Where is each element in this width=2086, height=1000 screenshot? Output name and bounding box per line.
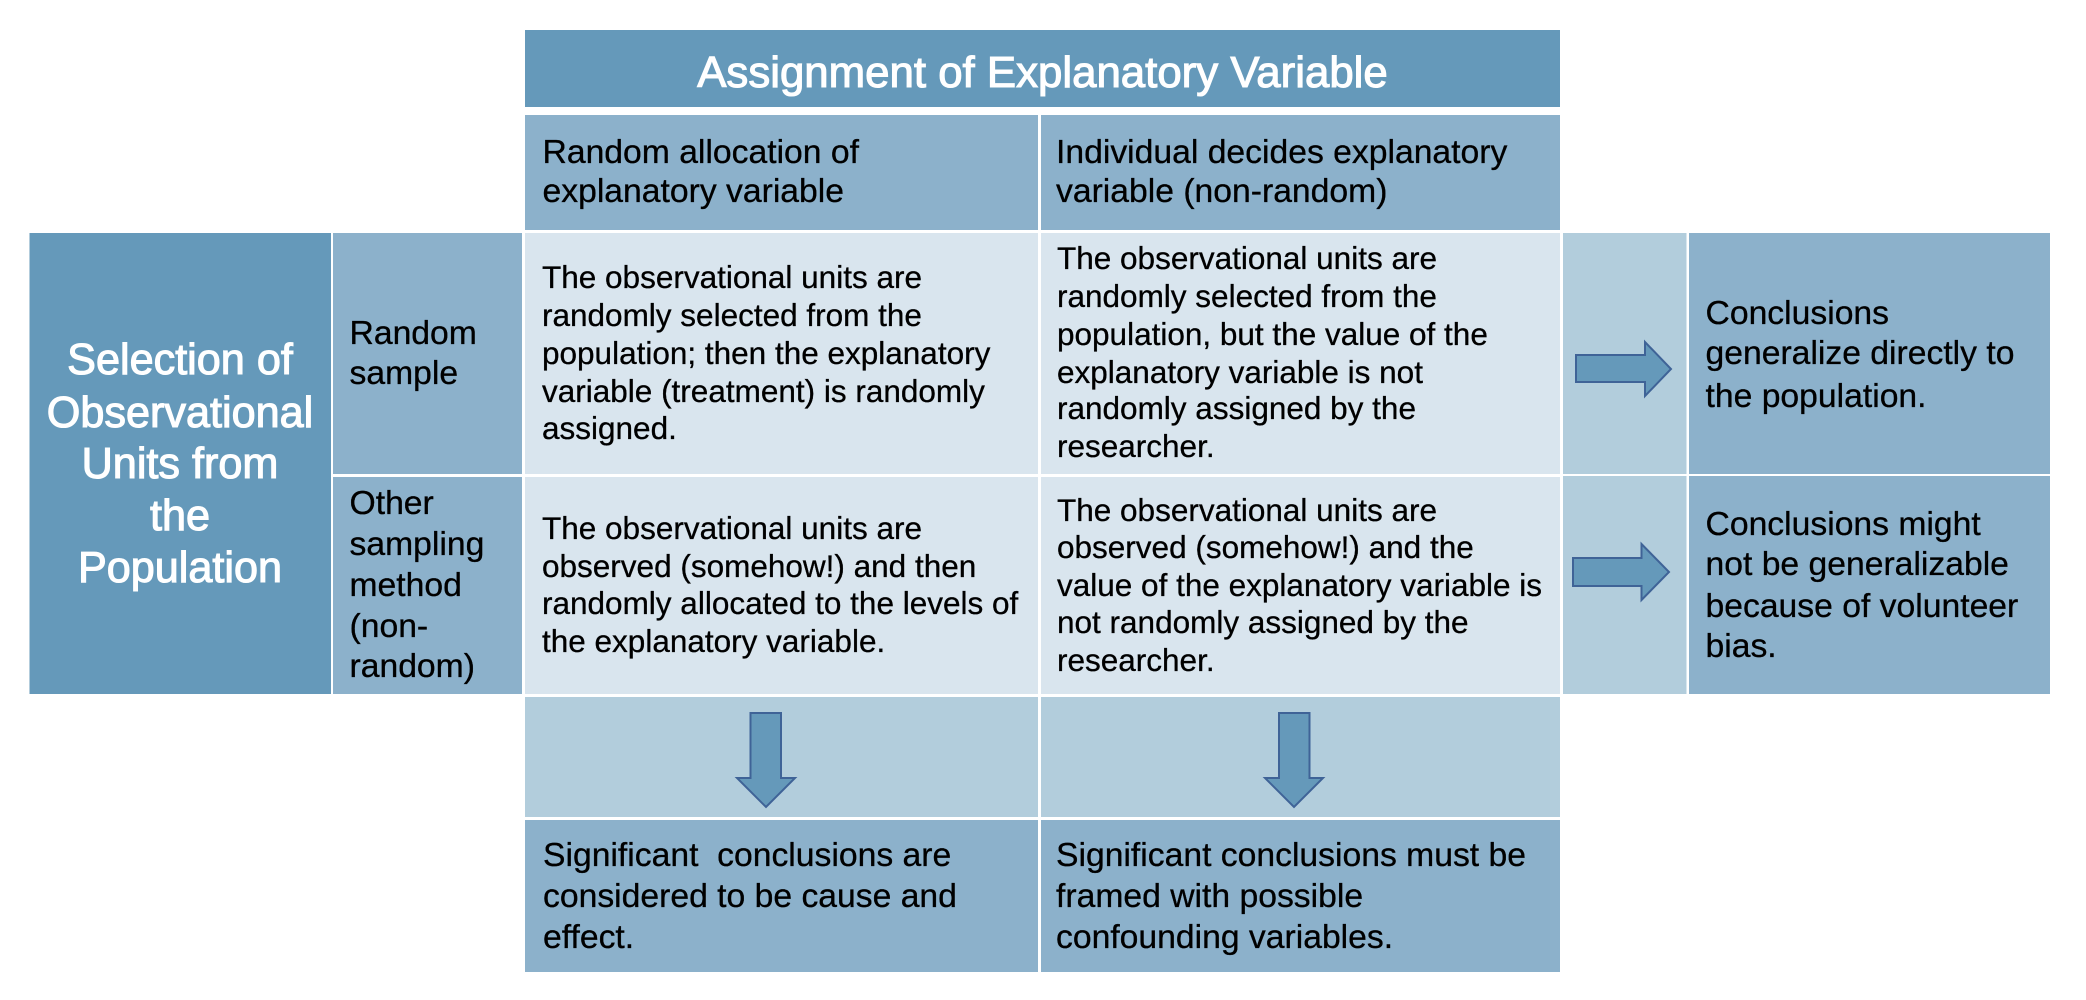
cell: random sample, individual decides: randomly assigned by the [1057,390,1416,426]
cell: other sampling, random allocation: randomly allocated to the levels of [542,585,1019,621]
cell: random sample, random allocation: population; then the explanatory [542,335,991,371]
column header: individual decides [1041,115,1560,230]
row header: other sampling method: method [350,566,462,604]
column header: individual decides: Individual decides explanatory [1056,133,1507,171]
cell: other sampling, random allocation: The observational units are [542,510,922,546]
column header: random allocation: Random allocation of [542,133,860,171]
cell: random sample, individual decides: researcher. [1057,428,1215,464]
row header: other sampling method: sampling [350,525,484,563]
conclusion: cause and effect: Significant conclusions are [543,836,951,874]
cell: random sample, random allocation: variable (treatment) is randomly [542,373,985,409]
cell: random sample, individual decides [1041,233,1560,474]
conclusion: generalize directly [1689,233,2050,474]
conclusion: confounding variables: Significant conclusions must be [1056,836,1526,874]
title: Assignment of Explanatory Variable [525,30,1560,107]
cell: other sampling, individual decides: value of the explanatory variable is [1057,567,1542,603]
cell: other sampling, random allocation [525,477,1038,694]
row header: random sample: sample [350,354,458,392]
column header: individual decides: variable (non-random) [1056,172,1387,210]
row header: other sampling method [333,477,522,694]
cell: random sample, individual decides: The observational units are [1057,240,1437,276]
arrow cell: right arrow, random sample [1563,233,1686,474]
row axis heading: selection of observational units: Units from [82,440,278,488]
cell: random sample, random allocation: randomly selected from the [542,297,922,333]
conclusion: confounding variables [1041,820,1560,972]
cell: other sampling, individual decides: researcher. [1057,642,1215,678]
conclusion: might not be generalizable [1689,476,2050,694]
row axis heading: selection of observational units: the [150,492,210,540]
conclusion: generalize directly: Conclusions [1706,294,1889,332]
cell: other sampling, individual decides: observed (somehow!) and the [1057,529,1474,565]
conclusion: might not be generalizable: bias. [1706,627,1777,665]
arrow cell: down arrow, individual decides [1041,697,1560,817]
conclusion: might not be generalizable: because of volunteer [1706,587,2018,625]
conclusion: cause and effect: effect. [543,918,634,956]
arrow cell: down arrow, random allocation [525,697,1038,817]
row header: other sampling method: random) [350,647,475,685]
cell: other sampling, individual decides: The observational units are [1057,492,1437,528]
conclusion: confounding variables: confounding variables. [1056,918,1393,956]
cell: other sampling, individual decides: not randomly assigned by the [1057,604,1468,640]
row axis heading: selection of observational units: Selection of [67,336,294,384]
conclusion: cause and effect: considered to be cause and [543,877,957,915]
title: Assignment of Explanatory Variable: Assignment of Explanatory Variable [697,48,1388,97]
row axis heading: selection of observational units: Observational [47,389,313,437]
cell: random sample, individual decides: explanatory variable is not [1057,354,1423,390]
row header: random sample [333,233,522,474]
cell: random sample, random allocation: The observational units are [542,259,922,295]
conclusion: generalize directly: generalize directly to [1706,334,2014,372]
cell: random sample, individual decides: randomly selected from the [1057,278,1437,314]
row header: random sample: Random [350,314,477,352]
cell: random sample, individual decides: population, but the value of the [1057,316,1488,352]
cell: random sample, random allocation [525,233,1038,474]
cell: other sampling, individual decides [1041,477,1560,694]
row header: other sampling method: Other [350,484,434,522]
column header: random allocation [525,115,1038,230]
cell: other sampling, random allocation: observed (somehow!) and then [542,548,976,584]
conclusion: generalize directly: the population. [1706,377,1927,415]
cell: random sample, random allocation: assigned. [542,410,677,446]
conclusion: might not be generalizable: Conclusions might [1706,505,1981,543]
column header: random allocation: explanatory variable [542,172,844,210]
arrow cell: right arrow, other sampling [1563,476,1686,694]
row axis heading: selection of observational units [30,233,331,694]
row axis heading: selection of observational units: Population [78,544,282,592]
row header: other sampling method: (non- [350,607,428,645]
conclusion: confounding variables: framed with possible [1056,877,1363,915]
cell: other sampling, random allocation: the explanatory variable. [542,623,885,659]
conclusion: might not be generalizable: not be generalizable [1706,545,2009,583]
conclusion: cause and effect [525,820,1038,972]
